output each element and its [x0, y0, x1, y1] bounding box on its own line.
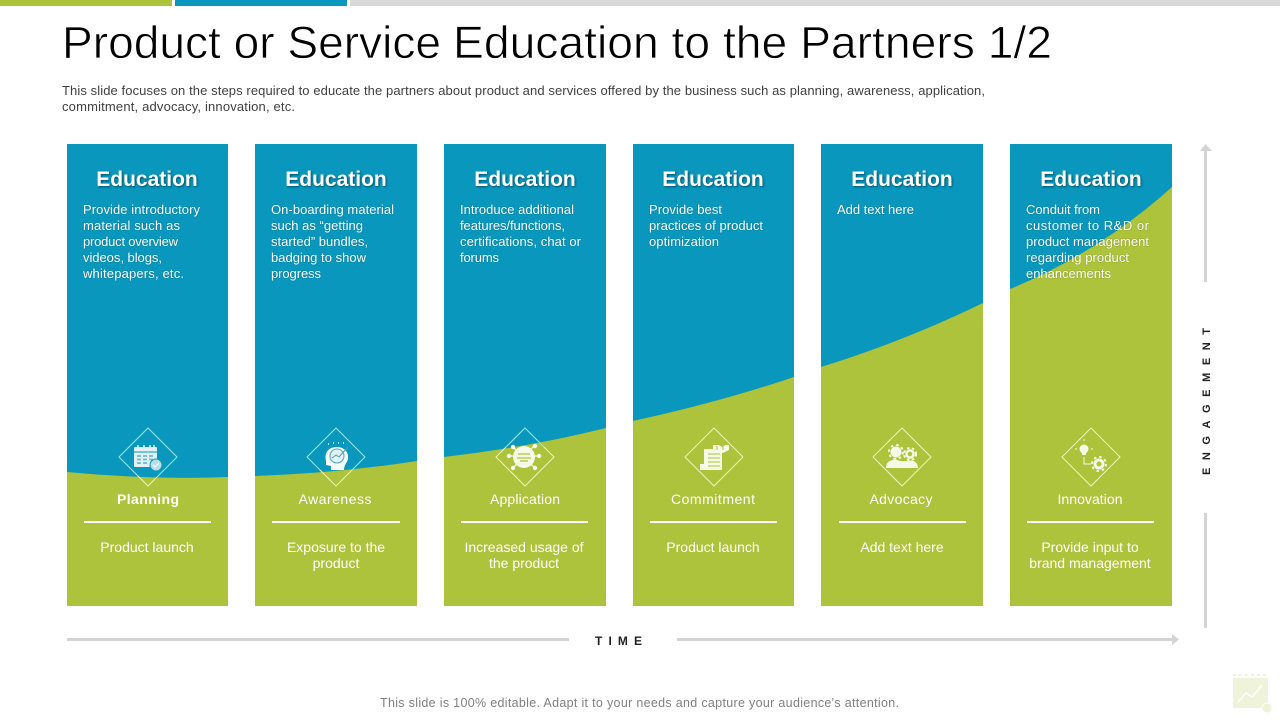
label: commitment: Commitment [671, 491, 755, 507]
text: exposure: Exposure to the [287, 539, 385, 555]
text: planning details: whitepapers, etc. [82, 266, 184, 281]
icon: head with target [307, 428, 365, 486]
icon: checklist and handshake [685, 428, 743, 486]
panel: innovation [1010, 144, 1172, 606]
text: brand management [1029, 539, 1151, 571]
text: increased usage: Increased usage of [464, 539, 584, 555]
icon: calendar [119, 428, 177, 486]
label: application: Application [490, 491, 560, 507]
divider [1027, 521, 1154, 523]
heading: application education: Education [474, 168, 576, 191]
title: Product or Service [62, 17, 441, 68]
text: planning details: Provide introductory [83, 202, 200, 217]
text: exposure: product [313, 555, 359, 571]
panel: application [444, 144, 606, 606]
divider [84, 521, 211, 523]
icon: bulb and gear [1062, 428, 1120, 486]
divider [272, 521, 400, 523]
text: awareness details [271, 202, 394, 281]
label: innovation: Innovation [1058, 491, 1122, 507]
label: engagement: ENGAGEMENT [1201, 328, 1213, 475]
arrow: engagement axis [1200, 144, 1213, 628]
label: awareness: Awareness [298, 491, 372, 507]
text: brand management: Provide input to [1041, 539, 1139, 555]
text: product launch: Product launch [100, 539, 194, 555]
footer note: This slide is 100% editable. Adapt it to your needs and capture your audience's attention. [380, 696, 899, 710]
text: awareness details: On-boarding material [271, 202, 394, 217]
text: planning details: videos, blogs, [83, 250, 162, 265]
label: planning: Planning [117, 491, 179, 507]
text: innovation details: product management [1026, 234, 1149, 249]
text: add text here: Add text here [860, 539, 944, 555]
text: advocacy details: Add text here [837, 202, 914, 217]
text: increased usage: the product [489, 555, 559, 571]
panel: commitment [633, 144, 794, 606]
icon: watermark chart [1233, 675, 1272, 713]
text: application details: certifications, chat or [460, 234, 582, 249]
label: time: TIME [595, 634, 642, 648]
heading: commitment education: Education [662, 168, 764, 191]
text: awareness details: started” bundles, [271, 234, 368, 249]
text: innovation details [1026, 202, 1150, 281]
text: application details: Introduce additional [460, 202, 574, 217]
text: innovation details: customer to R&D or [1026, 218, 1150, 233]
text: application details [460, 202, 582, 265]
heading: planning education: Education [96, 168, 198, 191]
text: planning details [82, 202, 200, 281]
text: commitment details: optimization [649, 234, 719, 249]
text: innovation details: regarding product [1026, 250, 1129, 265]
arrow: time axis [67, 634, 1179, 648]
text: innovation details: enhancements [1026, 266, 1112, 281]
text: exposure [287, 539, 385, 571]
top accent bars [0, 0, 1280, 6]
text: product launch: Product launch [666, 539, 760, 555]
text: planning details: material such as [83, 218, 180, 233]
panel: awareness [255, 144, 417, 606]
description: commitment, advocacy, innovation, etc. [62, 99, 295, 114]
text: planning details: product overview [83, 234, 179, 249]
divider [839, 521, 966, 523]
text: application details: forums [460, 250, 500, 265]
text: increased usage [464, 539, 584, 571]
label: advocacy: Advocacy [870, 491, 932, 507]
text: awareness details: progress [271, 266, 322, 281]
text: innovation details: Conduit from [1026, 202, 1100, 217]
title: Education to the Partners 1/2 [453, 17, 1052, 68]
text: awareness details: such as “getting [271, 218, 363, 233]
text: commitment details: Provide best [649, 202, 722, 217]
heading: advocacy education: Education [851, 168, 953, 191]
description [62, 83, 985, 114]
icon: hub [496, 428, 554, 486]
text: commitment details [649, 202, 763, 249]
heading: innovation education: Education [1040, 168, 1142, 191]
panel: planning [67, 144, 228, 606]
text: application details: features/functions, [460, 218, 565, 233]
panel: advocacy [821, 144, 983, 606]
icon: people with gears [873, 428, 931, 486]
title [62, 17, 1052, 68]
text: awareness details: badging to show [271, 250, 367, 265]
description: This slide focuses on the steps required to educate the partners about product and services offered by the business such as planning, awareness, application, [62, 83, 985, 98]
text: commitment details: practices of product [649, 218, 763, 233]
text: brand management: brand management [1029, 555, 1151, 571]
divider [461, 521, 588, 523]
heading: awareness education: Education [285, 168, 387, 191]
divider [650, 521, 777, 523]
